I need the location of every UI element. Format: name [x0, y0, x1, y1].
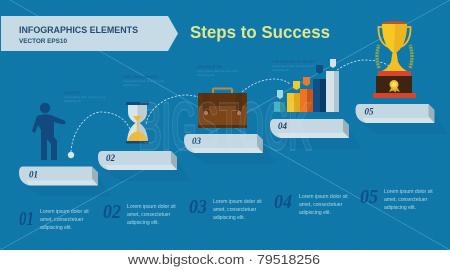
- text block 03: adipiscing elit.: [213, 215, 245, 221]
- text block 03: Lorem ipsum dolor sit: [213, 199, 262, 205]
- caption: step 4: THE CAPITAL OF MONEY: [272, 60, 316, 64]
- footer watermark text: www.bigstock.com · 79518256: [127, 253, 320, 267]
- text block 05: [360, 186, 433, 211]
- text block 02: adipiscing elit.: [127, 220, 159, 226]
- text block 01: adipiscing elit.: [40, 225, 72, 231]
- icon: hourglass: [126, 102, 149, 144]
- step 01: 01: [29, 170, 38, 180]
- step 05: [356, 104, 448, 134]
- text block 05: 05: [360, 186, 378, 208]
- icon: person: [32, 103, 66, 160]
- text block 02: [103, 201, 176, 226]
- caption: step 3: INFORMATION: [197, 65, 222, 69]
- text block 03: 03: [189, 196, 207, 218]
- banner: infographics elements: INFOGRAPHICS ELEMENTS: [19, 25, 138, 35]
- text block 04: amet, consectetuer: [299, 202, 343, 208]
- caption: step 4: Lorem ipsum dolor sit amet, cons: [272, 64, 314, 68]
- medal: [389, 80, 400, 92]
- caption: step 1: adipiscing elit: [64, 99, 81, 103]
- caption: step 1: [64, 91, 106, 103]
- caption: step 1: Lorem ipsum dolor sit amet, cons: [64, 95, 106, 99]
- caption: step 2: TIME MANAGEMENT: [123, 75, 160, 79]
- text block 03: [189, 196, 262, 221]
- banner: infographics elements: [1, 16, 178, 51]
- text block 01: 01: [19, 208, 34, 230]
- caption: step 1: STARTUP: [64, 91, 81, 95]
- step 02: [98, 151, 190, 181]
- step 03: 03: [192, 136, 202, 146]
- caption: step 2: adipiscing elit: [123, 83, 140, 87]
- caption: step 3: adipiscing elit: [197, 73, 214, 77]
- text block 05: adipiscing elit.: [384, 205, 416, 211]
- text block 05: Lorem ipsum dolor sit: [384, 189, 433, 195]
- step 04: 04: [278, 121, 288, 131]
- step 05: 05: [364, 106, 374, 116]
- caption: step 3: Lorem ipsum dolor sit amet, cons: [197, 69, 239, 73]
- step 03: [184, 134, 276, 164]
- text block 02: Lorem ipsum dolor sit: [127, 204, 176, 210]
- title: Steps to Success: [190, 22, 330, 42]
- text block 04: adipiscing elit.: [299, 210, 331, 216]
- text block 01: Lorem ipsum dolor sit: [40, 209, 89, 215]
- text block 05: amet, consectetuer: [384, 197, 428, 203]
- icon: briefcase: [198, 88, 247, 128]
- caption: step 4: [272, 60, 316, 72]
- text block 01: [19, 208, 89, 231]
- connector arcs: [71, 60, 392, 152]
- banner: infographics elements: VECTOR EPS10: [19, 38, 67, 45]
- text block 04: Lorem ipsum dolor sit: [299, 194, 348, 200]
- text block 03: amet, consectetuer: [213, 207, 257, 213]
- text block 02: 02: [103, 201, 121, 223]
- caption: step 2: [123, 75, 165, 87]
- caption: step 2: Lorem ipsum dolor sit amet, cons: [123, 79, 165, 83]
- marker: start dot: [68, 152, 74, 158]
- step 02: 02: [106, 153, 116, 163]
- text block 01: amet, consectetuer: [40, 217, 84, 223]
- caption: step 4: adipiscing elit: [272, 68, 289, 72]
- step 04: [270, 119, 362, 149]
- chart tags: [277, 59, 336, 99]
- text block 04: 04: [274, 191, 292, 213]
- bar chart: [274, 59, 339, 112]
- text block 04: [274, 191, 348, 216]
- caption: step 3: [197, 65, 239, 77]
- step 01: [19, 166, 111, 196]
- icon: trophy: [373, 21, 416, 98]
- text block 02: amet, consectetuer: [127, 212, 171, 218]
